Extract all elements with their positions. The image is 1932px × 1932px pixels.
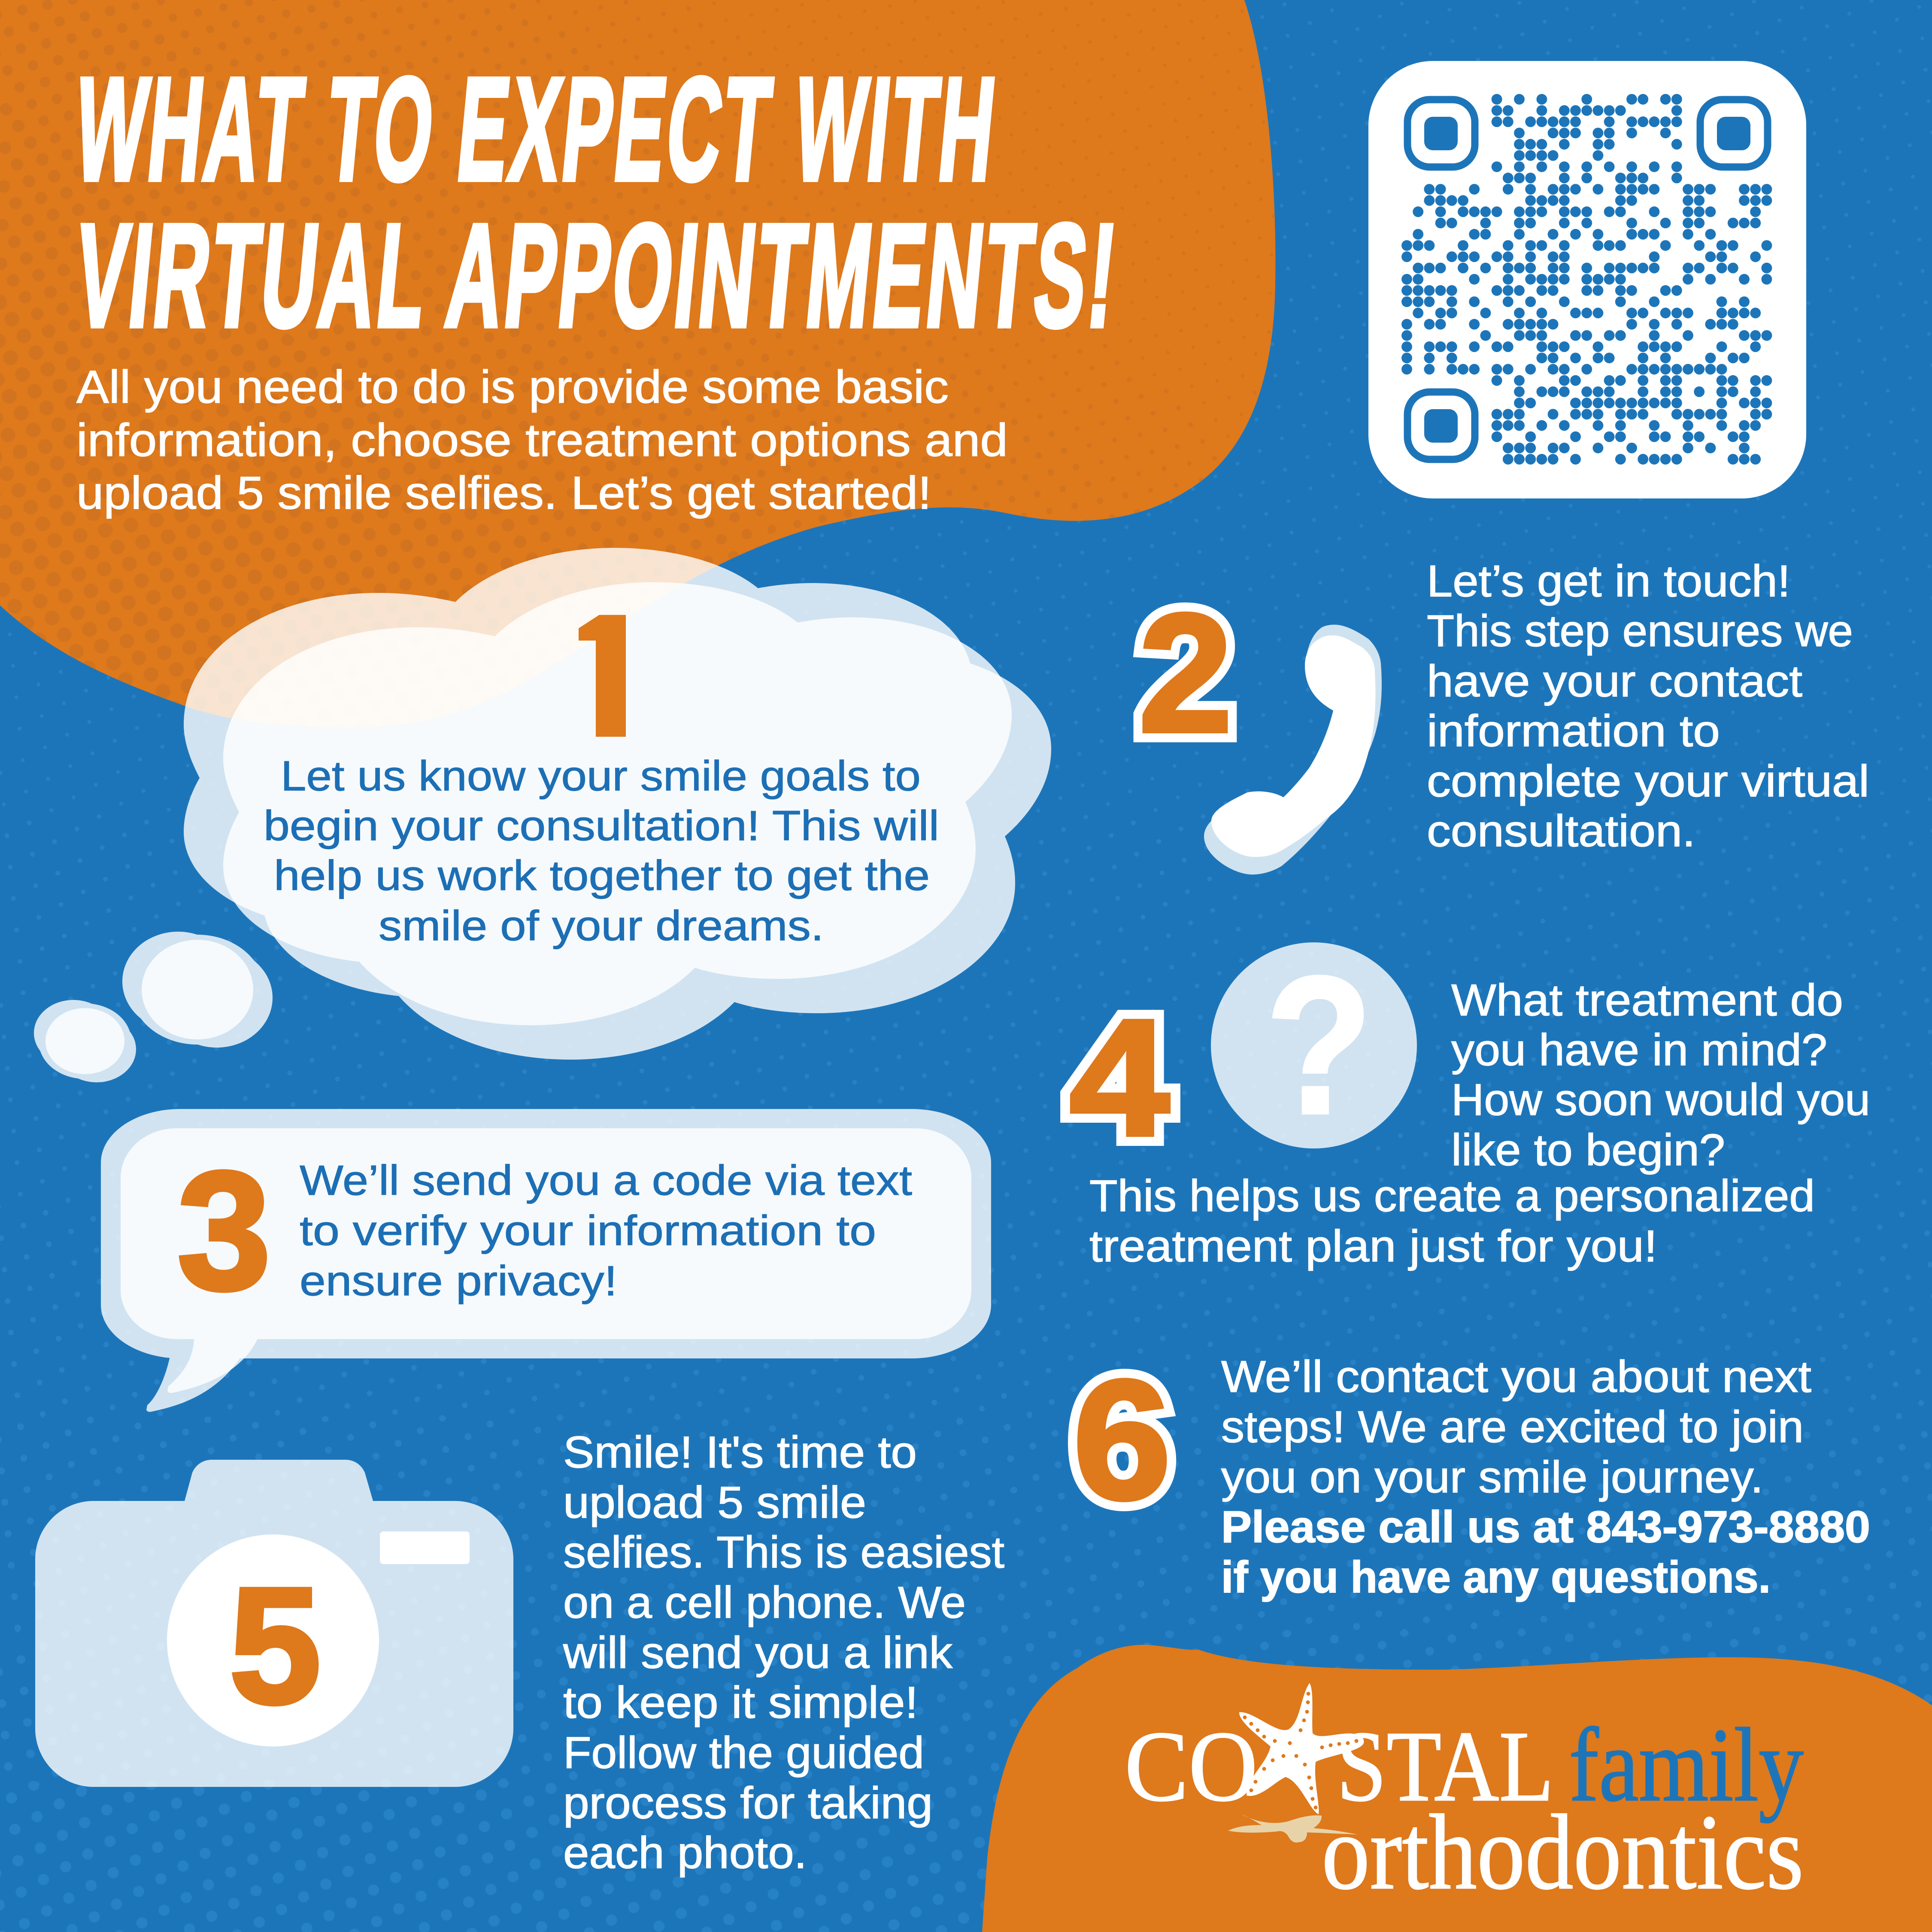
step 2 text: This step ensures we [1427, 606, 1853, 656]
step 1 text [264, 752, 939, 949]
step 5 text: each photo. [563, 1828, 807, 1878]
logo word CO: CO [1125, 1710, 1258, 1822]
step 5 text: Follow the guided [563, 1728, 924, 1778]
step 1 text: Let us know your smile goals to [281, 752, 921, 799]
step 3 text: to verify your information to [300, 1207, 876, 1254]
number 3: 3 [177, 1137, 271, 1325]
step 2 text [1427, 556, 1869, 856]
panel: step 3 speech bubble [101, 1109, 991, 1412]
icon: white starfish [1239, 1683, 1364, 1814]
step 5 text: upload 5 smile [563, 1478, 866, 1528]
title [69, 48, 1125, 357]
logo: Coastal Family Orthodontics [1125, 1683, 1804, 1912]
step 6 text: Please call us at 843-973-8880 [1221, 1502, 1870, 1552]
step 3 text [300, 1157, 912, 1304]
step 6 text: We’ll contact you about next [1221, 1352, 1811, 1402]
cloud back layer [184, 548, 1051, 1060]
step 4 text: How soon would you [1451, 1075, 1870, 1125]
step 5 text: will send you a link [563, 1628, 953, 1678]
step 5 text: process for taking [563, 1778, 933, 1828]
logo word STAL: STAL [1337, 1710, 1554, 1822]
step 5 text [563, 1428, 1004, 1878]
icon: phone [1204, 625, 1382, 875]
QR code card [1368, 61, 1806, 498]
step 3 text: ensure privacy! [300, 1257, 617, 1304]
step 5 text: Smile! It's time to [563, 1428, 917, 1477]
number 1: 1 [555, 579, 660, 790]
number 4: 4 [1070, 985, 1171, 1170]
step 4 text: What treatment do [1451, 975, 1843, 1025]
small thought bubble [34, 1000, 136, 1082]
step 4 text: like to begin? [1451, 1125, 1725, 1175]
step 5 text: to keep it simple! [563, 1678, 918, 1728]
number 2: 2 [1139, 579, 1232, 767]
icon: camera with number 5: 5 [229, 1553, 321, 1738]
step 4 text: treatment plan just for you! [1089, 1221, 1657, 1271]
panel: step 1 thought cloud [34, 548, 1051, 1082]
step 5 text: selfies. This is easiest [563, 1528, 1004, 1577]
QR finder: top left [1407, 100, 1475, 167]
number 6: 6 [1073, 1345, 1171, 1534]
cloud front layer [223, 582, 1012, 1025]
panel: bottom orange blob [982, 1645, 1932, 1932]
icon: question mark circle [1211, 936, 1417, 1155]
step 2 text: consultation. [1427, 806, 1695, 856]
step 1 text: help us work together to get the [274, 852, 930, 899]
step 1 text: smile of your dreams. [379, 902, 824, 949]
speech bubble front layer [121, 1128, 971, 1393]
step 2 text: Let’s get in touch! [1427, 556, 1790, 606]
step 2 text: complete your virtual [1427, 756, 1869, 806]
speech bubble back layer [101, 1109, 991, 1412]
QR modules [1407, 99, 1767, 459]
logo word orthodontics: orthodontics [1322, 1793, 1804, 1912]
step 6 text [1221, 1352, 1870, 1602]
intro text: All you need to do is provide some basic [76, 361, 949, 413]
step 6 text: you on your smile journey. [1221, 1452, 1763, 1502]
step 4 text: This helps us create a personalized [1089, 1171, 1815, 1221]
step 4 text: you have in mind? [1451, 1025, 1827, 1075]
step 6 text: steps! We are excited to join [1221, 1402, 1804, 1452]
step 2 text: information to [1427, 706, 1720, 756]
step 6 text: if you have any questions. [1221, 1552, 1771, 1602]
intro text: upload 5 smile selfies. Let’s get started! [76, 467, 931, 519]
intro text [76, 361, 1008, 519]
large thought bubble [122, 932, 273, 1048]
icon: camera with number 5 [35, 1460, 513, 1787]
intro text: information, choose treatment options and [76, 414, 1008, 466]
step 4 text [1089, 975, 1870, 1271]
number 6: 6 [1073, 1345, 1171, 1534]
step 1 text: begin your consultation! This will [264, 802, 939, 849]
panel: top orange blob [0, 0, 1276, 718]
logo word family: family [1569, 1707, 1804, 1823]
icon: question mark circle: ? [1265, 936, 1373, 1155]
title: WHAT TO EXPECT WITH [69, 48, 1004, 211]
step 5 text: on a cell phone. We [563, 1578, 966, 1628]
step 3 text: We’ll send you a code via text [300, 1157, 912, 1204]
number 4: 4 [1070, 985, 1171, 1170]
step 2 text: have your contact [1427, 656, 1802, 706]
icon: sand starfish [1228, 1814, 1358, 1843]
number 2: 2 [1139, 579, 1232, 767]
